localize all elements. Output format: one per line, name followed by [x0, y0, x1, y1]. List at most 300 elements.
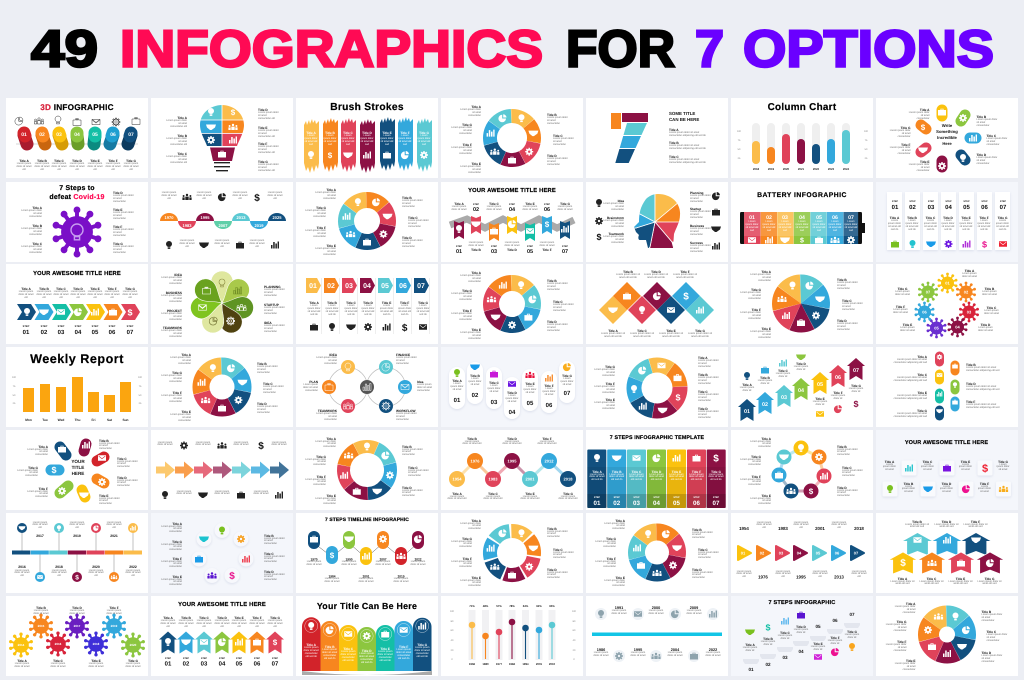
text labels: Title F [752, 474, 761, 478]
heading: 7 STEPS TIMELINE INFOGRAPHIC [325, 518, 409, 523]
chart: triangle arrows: 05 [816, 550, 821, 555]
text labels: Lorem ipsum dolor sit amet elit [484, 494, 502, 500]
text labels: Lorem ipsum dolor sit amet [106, 609, 122, 615]
text labels [731, 430, 873, 510]
chart: colored table: $ [713, 453, 719, 464]
text labels: Lorem ipsum dolor sit amet elit [36, 290, 52, 299]
text labels: Lorem ipsum dolor sit amet consectetur [698, 393, 719, 402]
text labels: Lorem ipsum dolor sit amet consectetur [740, 311, 761, 320]
text labels: Lorem ipsum dolor sit [740, 386, 754, 392]
chart: wave of half discs: 1983 [183, 223, 192, 228]
text labels: Lorem ipsum dolor sit amet [921, 462, 934, 471]
text labels: Title F [830, 636, 840, 640]
text labels: Title E [525, 382, 535, 386]
chart: cyan timeline: 2009 [690, 606, 698, 610]
text labels: Title E [525, 202, 535, 206]
text labels: Title B [402, 444, 412, 448]
text labels: Title G [917, 409, 927, 413]
text labels [746, 220, 858, 232]
text labels: Title C [986, 134, 996, 138]
text labels: Title B [669, 141, 679, 145]
chart: up arrows: STEP [201, 657, 208, 660]
text labels: Lorem ipsum dolor sit [849, 387, 863, 393]
chart: rising arrows: 04 [798, 388, 804, 394]
text labels: Lorem ipsum dolor sit amet elit sed do [708, 472, 724, 481]
chart: chevrons: $ [127, 308, 133, 318]
chart: capsules: 05 [92, 132, 98, 138]
text labels: Lorem ipsum dolor sit amet [978, 326, 993, 332]
panel: 3D infographic [6, 98, 148, 178]
chart: zigzag bookmarks: 07 [562, 249, 568, 255]
text labels: Lorem ipsum dolor sit amet elit [179, 239, 194, 248]
chart: cyan timeline [586, 596, 728, 676]
text labels: Lorem ipsum dolor sit amet consectetur [113, 211, 134, 220]
text labels: Title B [760, 376, 770, 380]
panel: chevron arrows [6, 264, 148, 344]
text labels: Lorem ipsum dolor sit amet consectetur [402, 488, 423, 497]
text labels: Lorem ipsum dolor sit amet consectetur [117, 478, 138, 487]
text labels: Title F [108, 159, 118, 163]
text labels: Title A [761, 270, 771, 274]
text labels: Lorem ipsum dolor sit amet consectetur [460, 108, 481, 117]
text labels: Lorem ipsum dolor sit amet [506, 394, 518, 403]
chart: zigzag bookmarks: 05 [527, 249, 533, 255]
text labels: Lorem ipsum dolor sit amet consectetur [27, 490, 48, 498]
text labels: Lorem ipsum dolor sit amet [125, 662, 140, 668]
chart: virus row [6, 596, 148, 676]
chart: lollipops: 65% [549, 604, 555, 608]
text labels: Lorem ipsum dolor sit amet consectetur adipiscing elit sed [966, 403, 999, 409]
text labels: Title C [927, 576, 936, 580]
text labels: Title E [326, 244, 336, 248]
chart: arrow circle [586, 347, 728, 427]
text labels [888, 216, 1009, 231]
text labels: Lorem ipsum dolor sit amet [902, 484, 915, 493]
text labels: Title B [907, 216, 917, 220]
text labels: Title F [399, 645, 408, 649]
text labels: Title D [547, 568, 557, 572]
text labels: Lorem ipsum dolor sit amet [88, 662, 104, 668]
text labels [731, 512, 873, 592]
text labels: Lorem ipsum dolor sit amet consectetur [402, 239, 423, 248]
text labels: Lorem ipsum dolor sit amet elit [70, 162, 85, 171]
text labels: Lorem ipsum dolor sit amet elit sed [324, 134, 336, 146]
text labels: Lorem ipsum dolor sit amet consectetur [161, 374, 182, 383]
text labels [876, 430, 1018, 510]
text labels: Title G [258, 160, 268, 164]
chart: zigzag bookmarks: STEP [544, 203, 551, 206]
panel: 7 steps timeline [296, 512, 438, 592]
text labels: Lorem ipsum dolor sit amet consectetur [594, 385, 615, 394]
chart: columns: 2019 [768, 167, 775, 171]
chart: columns [737, 123, 869, 171]
text labels: Lorem ipsum dolor sit amet [900, 326, 915, 332]
text labels: Title A [698, 356, 708, 360]
text labels: Lorem ipsum dolor sit amet elit [104, 290, 120, 299]
chart: radial capsules: Here [942, 141, 952, 146]
title: OPTIONS [743, 20, 994, 78]
text labels: Lorem ipsum dolor sit amet elit sed do [644, 273, 668, 279]
text labels [876, 596, 1018, 676]
text labels: Lorem ipsum dolor sit amet consectetur adipiscing elit sed [894, 394, 927, 400]
chart: colored table: 04 [653, 500, 660, 506]
chart: virus ring: 04 [955, 324, 960, 330]
panel: head puzzle [586, 182, 728, 262]
text labels: Title B [471, 248, 481, 252]
text labels: Title C [53, 659, 63, 663]
text labels: Title F [400, 301, 409, 305]
chart: circle ring: $ [809, 486, 814, 496]
text labels: Lorem ipsum dolor sit amet consectetur [886, 643, 906, 652]
text labels: Lorem ipsum dolor sit amet consectetur [698, 376, 719, 385]
text labels: Startup [690, 207, 701, 211]
text labels: Lorem ipsum dolor sit amet elit [18, 290, 34, 299]
text labels: Title B [698, 373, 708, 377]
chart: columns: 2024 [843, 167, 850, 171]
text labels: Lorem ipsum dolor sit amet consectetur adipiscing elit sed do [669, 131, 706, 137]
text labels: Title F [463, 556, 472, 560]
text labels: Lorem ipsum dolor sit amet [561, 377, 573, 386]
text labels: Lorem ipsum dolor sit amet elit sed do [906, 219, 918, 231]
text labels: Title F [901, 143, 910, 147]
chart: lollipops: 20 [451, 649, 454, 652]
text labels: Title C [553, 548, 563, 552]
text labels: Lorem ipsum dolor sit amet elit [161, 191, 176, 200]
text labels: Title A [326, 188, 336, 192]
text labels: Title F [463, 309, 472, 313]
chart: triangle arrows: 1983 [778, 526, 788, 530]
text labels: Lorem ipsum dolor sit amet [524, 385, 536, 394]
chart: lollipops: 62% [536, 604, 542, 608]
text labels: Lorem ipsum dolor sit amet elit sed [305, 134, 317, 146]
chart: infinity circles [296, 347, 438, 427]
text labels: Title G [605, 365, 615, 369]
chart: battery: 05 [816, 215, 822, 221]
text labels: Title D [837, 486, 847, 490]
chart: lollipops [441, 596, 583, 676]
text labels: Lorem ipsum dolor sit amet [984, 309, 999, 315]
text labels: Title F [680, 270, 690, 274]
text labels: Title F [544, 384, 554, 388]
chart: circle wave: 1954 [453, 476, 462, 481]
text labels: Lorem ipsum dolor sit amet consectetur [161, 329, 182, 338]
text labels: Title B [612, 470, 622, 474]
text labels: Title C [177, 152, 187, 156]
chart: tabs: 07 [417, 283, 425, 290]
chart: brush strokes: $ [328, 151, 333, 160]
text labels: Lorem ipsum dolor sit amet elit sed do [960, 219, 972, 231]
text labels [161, 273, 285, 338]
text labels: Lorem ipsum dolor sit amet consectetur elit sed do [415, 646, 430, 658]
text labels: Title A [471, 105, 481, 109]
text labels: Title B [37, 159, 47, 163]
text labels: Title E [90, 287, 100, 291]
text labels: Lorem ipsum dolor sit amet consectetur [909, 163, 930, 172]
text labels: Title E [815, 397, 825, 401]
chart: triangle arrows: 2018 [854, 526, 864, 530]
chart: columns: 75 [865, 139, 868, 142]
text labels: Lorem ipsum dolor sit amet consectetur [976, 156, 997, 165]
text labels: Lorem ipsum dolor sit amet elit sed [763, 220, 775, 232]
text labels: Title A [920, 108, 930, 112]
chart: up arrows: STEP [165, 657, 172, 660]
text labels [451, 105, 574, 174]
text labels: Title E [382, 131, 392, 135]
chart: lollipops: 80 [451, 620, 454, 623]
text labels: Title G [126, 159, 136, 163]
text labels: Lorem ipsum dolor sit amet elit [812, 570, 828, 578]
text labels: Lorem ipsum dolor sit amet consectetur [396, 356, 417, 365]
chart: circle wave: 1976 [471, 458, 480, 463]
text labels: Title B [257, 362, 267, 366]
panel: pentagon ring [441, 512, 583, 592]
chart: pin timeline: 1970 [310, 557, 318, 561]
chart: weekly bars: Sat [107, 418, 113, 422]
text labels: Lorem ipsum dolor sit amet elit sed do [996, 219, 1009, 231]
panel: circle wave [441, 430, 583, 510]
text labels: Title F [39, 486, 48, 490]
text labels: Title G [901, 126, 910, 130]
text labels: Lorem ipsum dolor sit amet [341, 560, 356, 566]
chart: wave of half discs: 2025 [273, 215, 282, 220]
chart: tabs: 06 [399, 283, 407, 290]
chart: tabs: 05 [381, 283, 389, 290]
text labels: Lorem ipsum dolor sit amet [157, 440, 172, 446]
text labels [876, 264, 1018, 344]
text labels: Title B [837, 278, 847, 282]
chart: step pillars: STEP [945, 200, 952, 203]
heading: 7 STEPS INFOGRAPHIC [769, 600, 835, 606]
chart: capsules: 01 [21, 132, 27, 138]
text labels: CAN BE HERE [669, 117, 699, 122]
text labels: Title A [669, 128, 679, 132]
chart: lollipops: 20 [573, 649, 576, 652]
chart: cyan timeline: 1991 [615, 606, 623, 610]
chart: battery: 07 [848, 215, 854, 221]
text labels: Lorem ipsum dolor sit amet consectetur [264, 288, 285, 297]
text labels: Lorem ipsum dolor sit amet consectetur elit [258, 129, 279, 138]
chart: chevrons: STEP [58, 325, 65, 328]
text labels: Title D [976, 153, 986, 157]
chart: columns: 50 [738, 148, 741, 151]
chart: weekly bars: Wed [58, 418, 64, 422]
chart: tabs: 01 [309, 283, 317, 290]
text labels: Lorem ipsum dolor sit amet elit sed [920, 580, 943, 585]
text labels: Lorem ipsum dolor sit amet elit sed do [345, 304, 357, 316]
text labels: Lorem ipsum dolor sit amet elit sed do [308, 304, 320, 316]
text labels: Title D [837, 319, 847, 323]
text labels: Title C [199, 616, 209, 620]
text labels: Title G [125, 287, 135, 291]
chart: stairs: 02 [765, 662, 771, 667]
text labels: Lorem ipsum dolor sit amet consectetur [460, 274, 481, 283]
chart: tabs: 04 [363, 283, 371, 290]
chart: icon squares [876, 430, 1018, 510]
chart: triangle arrows: 1976 [758, 574, 768, 579]
text labels: Lorem ipsum dolor sit amet [611, 609, 626, 615]
text labels: Lorem ipsum dolor sit amet consectetur [417, 383, 432, 392]
text labels: Lorem ipsum dolor sit [811, 645, 825, 651]
text labels: Title D [258, 108, 268, 112]
text labels: Lorem ipsum dolor sit amet elit [52, 568, 67, 577]
chart: triangle arrows: 07 [854, 550, 859, 555]
chart: lollipops: 80 [573, 620, 576, 623]
text labels: Title C [842, 299, 852, 303]
chart: soft pills [441, 347, 583, 427]
chart: chevrons: STEP [92, 325, 99, 328]
text labels: Lorem ipsum dolor sit amet consectetur elit sed do [322, 648, 337, 660]
text labels: Lorem ipsum dolor sit amet [630, 651, 646, 657]
text labels [890, 108, 1008, 172]
text labels [151, 596, 293, 676]
chart: soft pills: 04 [509, 409, 516, 416]
chart: segmented timeline: 2017 [36, 534, 44, 538]
chart: zigzag bookmarks [448, 203, 576, 255]
chart: colored table: 03 [633, 500, 640, 506]
chart: cyan timeline: 2004 [671, 648, 680, 652]
text labels: Title B [966, 363, 976, 367]
chart: radial capsules: $ [920, 123, 925, 132]
text labels: Title C [117, 456, 127, 460]
text labels: Title D [117, 476, 127, 480]
text labels: Title F [400, 131, 410, 135]
text labels: Title D [651, 270, 661, 274]
text labels: Lorem ipsum dolor sit amet elit [756, 520, 772, 529]
panel: column chart [731, 98, 873, 178]
text labels: Title E [761, 494, 771, 498]
text labels: Lorem ipsum dolor sit amet elit sed [949, 580, 972, 585]
panel: cyan timeline [586, 596, 728, 676]
text labels: Lorem ipsum dolor sit amet consectetur [976, 118, 997, 127]
text labels: Lorem ipsum dolor sit amet elit [249, 239, 264, 248]
chart: chevrons: STEP [41, 325, 48, 328]
text labels: Title G [172, 540, 182, 544]
text labels: Title F [252, 616, 262, 620]
text labels: Lorem ipsum dolor sit amet consectetur [740, 291, 761, 300]
text labels: Title G [417, 643, 427, 647]
panel: soft circle ring [151, 512, 293, 592]
chart: colored table: 02 [613, 500, 621, 506]
text labels: Lorem ipsum dolor sit amet consectetur [27, 448, 48, 456]
text labels: Lorem ipsum dolor sit amet consectetur [886, 623, 906, 632]
chart: virus ring: 05 [934, 326, 939, 330]
text labels: Lorem ipsum dolor sit amet elit [70, 520, 85, 529]
text labels: Title B [402, 196, 412, 200]
chart: rising arrows: 07 [853, 368, 859, 374]
chart: zigzag bookmarks: STEP [456, 245, 463, 248]
chart: segmented timeline: 2018 [55, 564, 63, 568]
chart: radial capsules [916, 104, 982, 172]
chart: wave of half discs: 2007 [219, 223, 228, 228]
panel: covid steps [6, 182, 148, 262]
text labels: Lorem ipsum dolor sit amet elit sed do [417, 304, 429, 316]
text labels: Title D [796, 625, 806, 629]
text labels: Lorem ipsum dolor sit amet consectetur [553, 550, 574, 559]
text labels: Title B [470, 374, 480, 378]
chart: segmented ring [483, 109, 541, 167]
text labels: Lorem ipsum dolor sit amet consectetur [305, 209, 326, 218]
text labels: Lorem ipsum dolor sit amet consectetur [113, 245, 134, 254]
text labels: Lorem ipsum dolor sit amet [469, 377, 481, 386]
text labels: Lorem ipsum dolor sit amet [50, 662, 66, 668]
chart: pie [772, 274, 830, 332]
chart: zigzag bookmarks: STEP [473, 203, 480, 206]
text labels: Lorem ipsum dolor sit amet elit sed [935, 522, 958, 528]
text labels: Lorem ipsum dolor sit amet elit sed do [669, 472, 684, 481]
text labels: Lorem ipsum dolor sit amet [686, 609, 702, 615]
chart: lollipops: 2001 [536, 662, 543, 666]
text labels: Title G [113, 242, 123, 246]
title [30, 20, 994, 78]
text labels: Lorem ipsum dolor sit amet elit [232, 191, 248, 200]
text labels: Title E [666, 329, 676, 333]
text labels: Title D [692, 568, 702, 572]
text labels: Title G [898, 287, 907, 291]
chart: virus ring: 03 [966, 310, 971, 314]
chart: wave of half discs: 2019 [255, 223, 264, 228]
text labels: Lorem ipsum dolor sit amet [893, 308, 908, 314]
text labels: Lorem ipsum dolor sit amet consectetur [909, 111, 930, 120]
text labels: Lorem ipsum dolor sit amet consectetur [408, 219, 429, 228]
text labels: Title C [698, 390, 708, 394]
text labels: Lorem ipsum dolor sit amet elit sed do [688, 332, 712, 338]
text labels: Lorem ipsum dolor sit amet consectetur [451, 540, 472, 548]
text labels: Title F [980, 482, 989, 486]
text labels: Title G [560, 202, 570, 206]
panel: infinity circles [296, 347, 438, 427]
chart: virus ring [876, 264, 1018, 344]
chart: rising arrows: 01 [744, 409, 750, 415]
chart: segmented timeline: 2016 [18, 564, 26, 568]
text labels: Title D [402, 236, 412, 240]
text labels: Title D [942, 482, 951, 486]
chart: weekly bars: 75 [139, 385, 142, 388]
text labels: Title G [751, 454, 761, 458]
chart: pin timeline: 1984 [328, 574, 336, 578]
chart: columns: 25 [865, 157, 868, 160]
chart: lollipops: 1980 [482, 662, 489, 666]
chart: colored table: STEP [614, 496, 620, 498]
chart: battery: $ [800, 236, 804, 244]
chart: pin timeline: $ [330, 550, 335, 560]
chart: zigzag bookmarks: 04 [509, 207, 516, 213]
text labels: Lorem ipsum dolor sit amet [69, 609, 84, 615]
text labels: Title D [698, 407, 708, 411]
text labels: Lorem ipsum dolor sit amet elit [14, 568, 30, 577]
text labels: Lorem ipsum dolor sit amet elit [54, 290, 69, 299]
chart: battery: 03 [782, 215, 788, 221]
text labels: Lorem ipsum dolor sit amet elit sed do [659, 332, 683, 338]
text labels [586, 430, 728, 510]
text labels: Title E [917, 391, 927, 395]
text labels: Title A [965, 269, 974, 273]
chart: columns: 2021 [798, 167, 805, 171]
text labels: Title B [837, 444, 847, 448]
text labels: Title A [890, 216, 899, 220]
chart: stairs: 07 [849, 612, 855, 617]
text labels: Title A [471, 518, 481, 522]
text labels: Lorem ipsum dolor sit amet elit sed [891, 580, 914, 585]
text labels [586, 347, 728, 427]
chart: icon squares: $ [981, 462, 988, 474]
text labels: Lorem ipsum dolor sit amet consectetur [890, 146, 910, 155]
chart: lollipops: 60 [451, 629, 454, 632]
text labels: Lorem ipsum dolor sit amet consectetur [604, 522, 625, 530]
text labels: Idea [618, 199, 624, 203]
chart: radial capsules: Something [936, 129, 958, 134]
text labels: Title G [316, 206, 326, 210]
text labels: Title F [317, 474, 326, 478]
